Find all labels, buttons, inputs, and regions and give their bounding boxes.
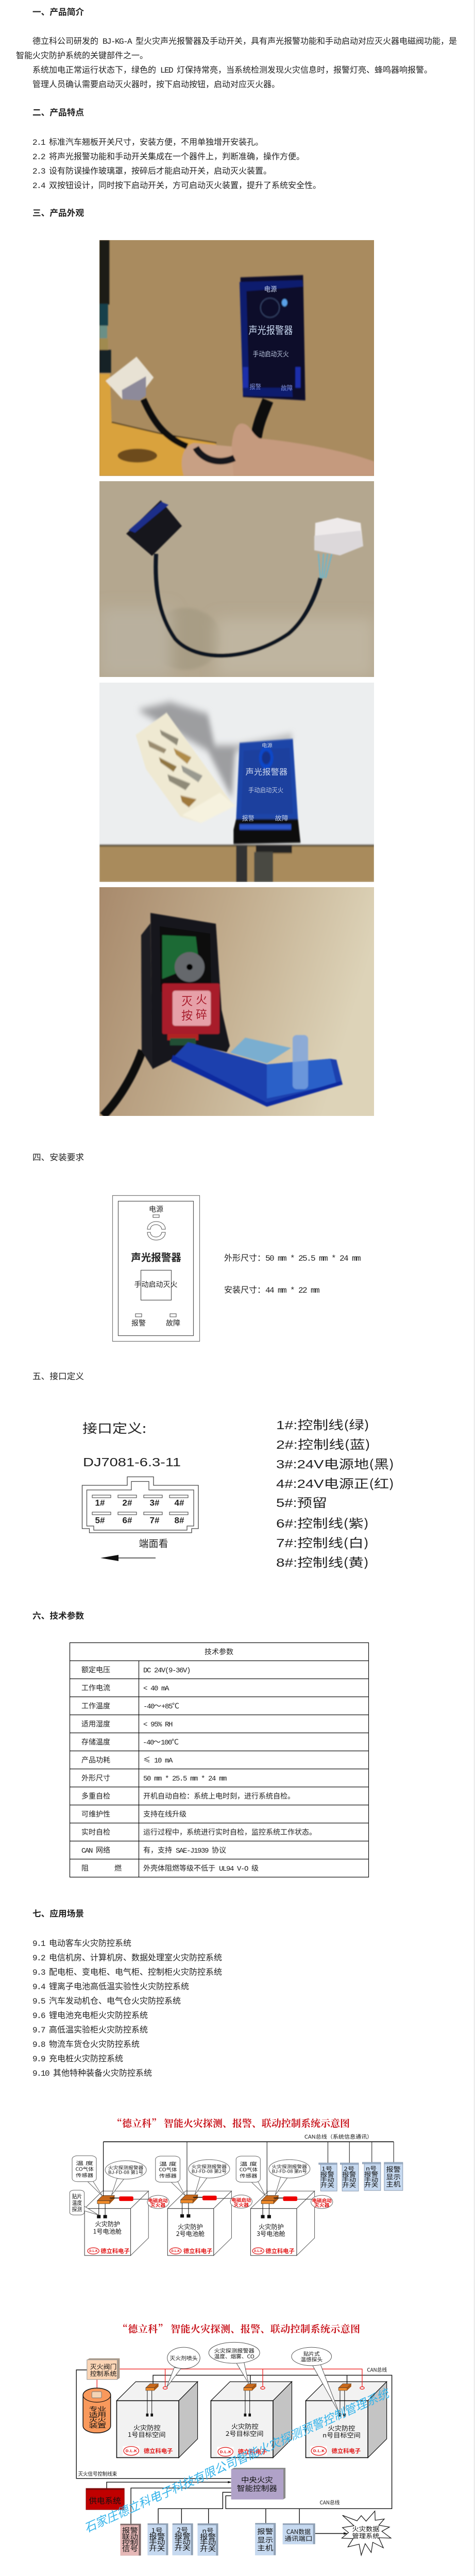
manual switches: 手动 [149,2537,165,2547]
photo: opened device with blue cover [99,887,374,1116]
space labels [128,2421,361,2439]
CAN bus and control wires [76,2370,392,2533]
bubble texts 3: 电磁启动 [312,2196,332,2204]
bubble texts 1 [72,2159,168,2235]
power system: 供电系统 [89,2494,121,2506]
table: tech params: 技术参数 [205,1647,233,1657]
table: tech params: 工作温度 [81,1701,110,1711]
bubble texts 2: 2号电池舱 [176,2229,205,2238]
photo: connector pins and device front: 手动启动灭火 [248,785,283,794]
table: tech params: -40～100℃ [143,1737,179,1747]
space labels: 火灾防控 [133,2423,161,2432]
list: wire definitions: 2#:控制线(蓝) [276,1435,370,1452]
manual switches [147,2523,218,2555]
linkage signal: 报警 [122,2526,138,2535]
bubble texts 3: 温 度 [240,2160,258,2167]
table: tech params: 支持在线升级 [143,1809,186,1819]
CAN data port [283,2523,315,2544]
bubble texts 3: 3号电池舱 [257,2229,285,2238]
table: tech params: 运行过程中，系统进行实时自检，监控系统工作状态。 [143,1827,316,1837]
list: wire definitions [276,1415,394,1570]
bubble texts 2: 温 度 [159,2160,177,2167]
table: tech params: 外壳体阻燃等级不低于 UL94 V-O 级 [143,1863,259,1873]
central controller: 中央火灾 [241,2474,273,2485]
label on red button: 按 [181,1007,193,1023]
list: applications: 9.2 电信机房、计算机房、数据处理室火灾防控系统 [32,1951,222,1963]
manual switches: 手动 [175,2537,191,2547]
chart 1: battery compartments network: CAN总线（系统信息通讯） [304,2132,372,2140]
bubble texts 3: 灭火器 [314,2201,330,2209]
central controller: 智能控制器 [237,2482,277,2493]
sensor bubbles [70,2156,333,2215]
switch texts: n号 [366,2164,377,2173]
table: tech params: 适用湿度 [81,1719,110,1729]
bubble texts 1: 1号电池舱 [93,2227,122,2235]
chart 1: battery compartments network [70,2132,403,2256]
fire data system burst: 管理系统 [352,2531,379,2540]
diagram: connector definition: 接口定义: [82,1418,146,1436]
list: wire definitions: 5#:预留 [276,1493,327,1511]
bubble texts 1: 火灾防护 [95,2219,120,2228]
bubble texts 1: CO气体 [75,2165,94,2173]
list: wire definitions: 3#:24V电源地(黑) [276,1454,394,1472]
table: tech params: 多重自检 [81,1791,110,1801]
table: tech params: -40～+85℃ [143,1701,179,1711]
diagram: device front panel: 故障 [166,1318,180,1328]
table: tech params: < 40 mA [143,1685,169,1693]
manual switches: 1号 [151,2526,163,2535]
table: tech params: 实时自检 [81,1827,110,1837]
alarm host [255,2523,276,2555]
table: tech params: CAN 网络 [81,1845,110,1855]
diagram: connector definition: 1# [95,1498,105,1507]
switch texts: 手动 [342,2176,356,2183]
manual switches: 开关 [149,2544,165,2553]
space labels: n号目标空间 [323,2430,361,2439]
label on red button: 火 [196,991,207,1007]
photo: connector pins and device front: 电源 [262,742,273,749]
bubble texts 3: CO气体 [240,2166,258,2173]
bubble texts 2: 灭火器 [234,2201,249,2208]
logos: D.L.K [313,2448,325,2453]
bubble texts 3 [240,2160,332,2238]
re-draw CAN drops over compartments [104,2190,267,2196]
photo: connector pins and device front: 报警 [242,813,255,822]
diagram: device front panel [112,1195,200,1342]
logos: 德立科电子 [332,2447,361,2455]
diagram: connector definition: 3# [150,1498,160,1507]
list: wire definitions: 8#:控制线(黄) [276,1553,369,1570]
manual switches: n号 [202,2526,214,2535]
logos: D.L.K [89,2249,98,2253]
logos: D.L.K [171,2249,180,2253]
diagram: connector definition: 7# [150,1516,160,1525]
logos: 德立科电子 [100,2247,130,2255]
heading: product intro: 一、产品简介 [32,5,84,18]
list: applications: 9.4 锂离子电池高低温实验性火灾防控系统 [32,1979,189,1992]
callout texts: 温感探头 [300,2355,323,2363]
linkage signal [121,2524,141,2555]
list: applications: 9.3 配电柜、变电柜、电气柜、控制柜火灾防控系统 [32,1965,222,1977]
heading: tech params: 六、技术参数 [32,1609,84,1621]
label on red button: 碎 [196,1006,207,1022]
label on red button [181,994,207,1021]
extinguisher tank: 适用 [89,2411,106,2418]
diagram: connector definition: 6# [123,1516,132,1525]
table: tech params: 阻 [81,1863,89,1873]
logos: D.L.K [219,2449,232,2454]
table: tech params: DC 24V(9-36V) [143,1667,190,1675]
heading: appearance: 三、产品外观 [32,206,84,218]
bubble texts 2: BJ-FD-08 第2号 [192,2168,227,2175]
list: wire definitions: 4#:24V电源正(红) [276,1474,394,1492]
chart 2 watermark: 石家庄德立科电子科技有限公司智能火灾探测预警控制管理系统 [81,2383,393,2536]
logos: D.L.K [254,2249,263,2253]
switch texts: 开关 [320,2181,334,2189]
bubble texts 1: 温 度 [76,2159,94,2166]
bubble texts 3: 火灾探测报警器 [272,2163,307,2170]
heading: applications: 七、应用场景 [32,1907,84,1919]
CAN data port: CAN数据 [286,2527,311,2536]
logos: 德立科电子 [144,2447,173,2455]
power system [86,2488,124,2510]
list: applications [32,1936,222,2078]
list: features [32,135,321,191]
alarm host: 主机 [257,2543,274,2553]
logos: D.L.K [126,2448,138,2453]
list: wire definitions: 7#:控制线(白) [276,1533,369,1551]
photo: device held in hand: 报警 [249,382,261,392]
dimensions: outline: 外形尺寸：50 mm * 25.5 mm * 24 mm [224,1251,361,1263]
wire labels: 灭火信号控制线束 [78,2470,117,2477]
bubble texts 1: 火灾探测报警器 [108,2164,144,2171]
logos [88,2247,295,2255]
bubble texts 1: BJ-FD-08 第1号 [108,2169,143,2175]
bubble texts 2: 火灾防护 [178,2222,203,2231]
callouts [167,2342,340,2414]
red extinguishing lines [97,2369,364,2389]
bubble texts 3: 传感器 [240,2172,258,2179]
extinguisher tank: 专业 [89,2405,106,2413]
list: applications: 9.9 充电桩火灾防控系统 [32,2052,123,2064]
logos: 德立科电子 [238,2448,267,2455]
switch texts: 2号 [344,2165,354,2173]
switch texts: 报警 [320,2170,334,2178]
manual switches and host [319,2162,403,2191]
diagram: device front panel: 声光报警器 [131,1249,181,1264]
list: features: 2.4 双按钮设计，同时按下启动开关，方可启动灭火装置，提升了系统安全性。 [32,178,321,191]
chart 1 title: “德立科” 智能火灾探测、报警、联动控制系统示意图 [112,2116,350,2130]
text block: product intro: 系统加电正常运行状态下，绿色的 LED 灯保持常亮，当系统检测发现火灾信息时，报警灯亮、蜂鸣器响报警。 [32,63,432,75]
valve control box [87,2358,120,2380]
diagram: connector definition: 5# [95,1516,105,1525]
space labels: 2号目标空间 [226,2429,263,2438]
photo: device held in hand: 电源 [264,284,277,294]
wire labels: CAN总线 [320,2498,340,2506]
bubble texts 3: 火灾防护 [259,2222,284,2231]
photo: device held in hand: 故障 [281,383,293,393]
chart 2 title: “德立科” 智能火灾探测、报警、联动控制系统示意图 [118,2321,360,2335]
valve control box: 灭火阀门 [90,2362,116,2371]
CAN data port: 通讯端口 [284,2534,312,2543]
table: tech params: < 95% RH [143,1721,173,1729]
bubble texts 1: 贴片 [72,2193,82,2200]
bubble texts 2: 火灾探测报警器 [192,2163,227,2170]
extinguisher tank [83,2388,111,2433]
bubble texts 2: 电磁启动 [231,2196,251,2203]
callout texts: 灭火剂喷头 [169,2354,198,2362]
diagram: device front panel: 手动启动灭火 [134,1279,177,1290]
manual switches: 报警 [200,2532,216,2541]
table: tech params [70,1642,369,1877]
diagram: connector definition [82,1418,198,1561]
diagram: connector definition: 端面看 [139,1536,168,1550]
extinguisher tank: 灭火 [89,2416,107,2424]
diagram: connector definition: DJ7081-6.3-11 [83,1456,181,1469]
list: wire definitions: 1#:控制线(绿) [276,1415,369,1433]
callout texts: 火灾探测报警器 [214,2347,255,2354]
manual switches: 开关 [175,2543,191,2553]
switch texts: 手动 [320,2176,334,2183]
table: tech params: ≤ 10 mA [143,1755,173,1765]
extinguisher tank: 装置 [89,2421,106,2430]
linkage signal: 联动 [122,2532,138,2541]
switch texts: 主机 [386,2179,401,2189]
text block: product intro [16,34,457,90]
linkage signal: 控制 [122,2538,138,2548]
diagram: connector definition: 2# [123,1498,132,1507]
manual switches: 开关 [200,2544,216,2553]
table: tech params: 燃 [114,1863,122,1873]
bubble texts 1: 温度 [72,2199,82,2207]
list: applications: 9.10 其他特种装备火灾防控系统 [32,2066,152,2078]
label on red button: 灭 [181,992,193,1009]
switch texts: 报警 [386,2165,401,2174]
heading: interface: 五、接口定义 [32,1369,84,1382]
table: tech params: 50 mm * 25.5 mm * 24 mm [143,1775,227,1783]
fire data system burst: 火灾数据 [352,2524,379,2533]
list: applications: 9.5 汽车发动机仓、电气仓火灾防控系统 [32,1994,181,2006]
bubble texts 1: 电磁启动 [148,2196,168,2204]
space labels: 1号目标空间 [128,2430,165,2439]
fire data system burst [342,2511,391,2555]
logos: 德立科电子 [265,2247,295,2255]
dimensions: mounting: 安装尺寸：44 mm * 22 mm [224,1283,319,1295]
CAN bus [104,2142,394,2197]
list: features: 2.1 标准汽车翘板开关尺寸，安装方便，不用单独增开安装孔。 [32,135,263,147]
bubble texts 3: BJ-FD-08 第n号 [272,2168,307,2175]
table: tech params: 工作电流 [81,1683,110,1693]
list: applications: 9.6 锂电池充电柜火灾防控系统 [32,2008,148,2021]
manual switches: 手动 [200,2538,216,2548]
text block: product intro: 德立科公司研发的 BJ-KG-A 型火灾声光报警器及手动开关，具有声光报警功能和手动启动对应灭火器电磁阀功能，是 [32,34,457,46]
photo: device with cable and connector [99,481,374,677]
table: tech params: 开机自动自检：系统上电时刻，进行系统自检。 [143,1791,295,1801]
chart 2: shared extinguisher system [76,2342,392,2555]
photo: device held in hand: 手动启动灭火 [253,349,289,359]
callout texts [169,2347,323,2363]
compartments [84,2191,315,2256]
switch texts [320,2164,401,2189]
alarm host: 显示 [257,2535,273,2545]
table: tech params: 外形尺寸 [81,1773,110,1783]
bubble texts 2: 传感器 [159,2172,177,2179]
photo: device held in hand: 声光报警器 [248,323,293,337]
wire labels: CAN总线 [367,2366,387,2373]
list: wire definitions: 6#:控制线(紫) [276,1514,369,1531]
list: applications: 9.7 高低温实验柜火灾防控系统 [32,2023,148,2035]
switch texts: 报警 [342,2170,356,2178]
heading: features: 二、产品特点 [32,106,84,118]
manual switches: 报警 [149,2532,165,2541]
manual switches: 2号 [177,2525,188,2534]
callout texts: 温度、烟雾、CO [214,2352,255,2360]
logos [123,2446,361,2456]
photo: connector pins and device front [99,683,374,883]
list: features: 2.2 将声光报警功能和手动开关集成在一个器件上，判断准确，操作方便。 [32,149,304,162]
bubble texts 1: 灭火器 [150,2201,165,2209]
alarm host: 报警 [257,2527,273,2536]
modules [146,2384,351,2416]
photo: connector pins and device front: 故障 [275,813,289,822]
diagram: device front panel: 报警 [131,1318,146,1328]
table: tech params: 额定电压 [81,1665,110,1675]
valve control box: 控制系统 [90,2369,116,2378]
table: tech params: 产品功耗 [81,1755,110,1765]
diagram: connector definition: 8# [175,1516,184,1525]
switch texts: 显示 [386,2172,401,2181]
list: applications: 9.8 物流车货仓火灾防控系统 [32,2037,140,2049]
central controller [231,2468,285,2499]
space labels: 火灾防控 [231,2421,259,2431]
photo: connector pins and device front: 声光报警器 [245,766,287,777]
bubble texts 2 [159,2160,251,2238]
target spaces [116,2382,387,2458]
table: tech params: 存储温度 [81,1737,110,1747]
manual switches: 报警 [175,2531,191,2540]
logos: 德立科电子 [183,2247,212,2255]
photo: device held in hand [99,240,374,476]
switch texts: 报警 [364,2170,378,2178]
diagram: device front panel: 电源 [149,1204,163,1214]
switch texts: 手动 [364,2176,378,2183]
linkage signal: 信号 [122,2544,138,2553]
wire labels [78,2366,387,2506]
text block: product intro: 智能火灾防护系统的关键部件之一。 [16,48,148,61]
diagram: connector definition: 4# [175,1498,184,1507]
heading: install requirements: 四、安装要求 [32,1150,84,1163]
switch texts: 开关 [364,2181,378,2189]
text block: product intro: 管理人员确认需要启动灭火器时，按下启动按钮，启动对应灭火器。 [32,77,280,90]
list: features: 2.3 设有防误操作玻璃罩，按碎后才能启动开关，启动灭火装置。 [32,164,272,176]
bubble texts 1: 传感器 [76,2171,93,2178]
switch texts: 1号 [321,2165,332,2173]
bubble texts 1: 探测 [72,2205,82,2213]
list: applications: 9.1 电动客车火灾防控系统 [32,1936,131,1948]
table: tech params: 有，支持 SAE-J1939 协议 [143,1845,226,1855]
bubble texts 2: CO气体 [159,2166,177,2173]
switch texts: 开关 [342,2181,356,2189]
space labels: 火灾防控 [328,2424,355,2432]
callout texts: 贴片式 [303,2350,320,2357]
table: tech params: 可维护性 [81,1809,110,1819]
